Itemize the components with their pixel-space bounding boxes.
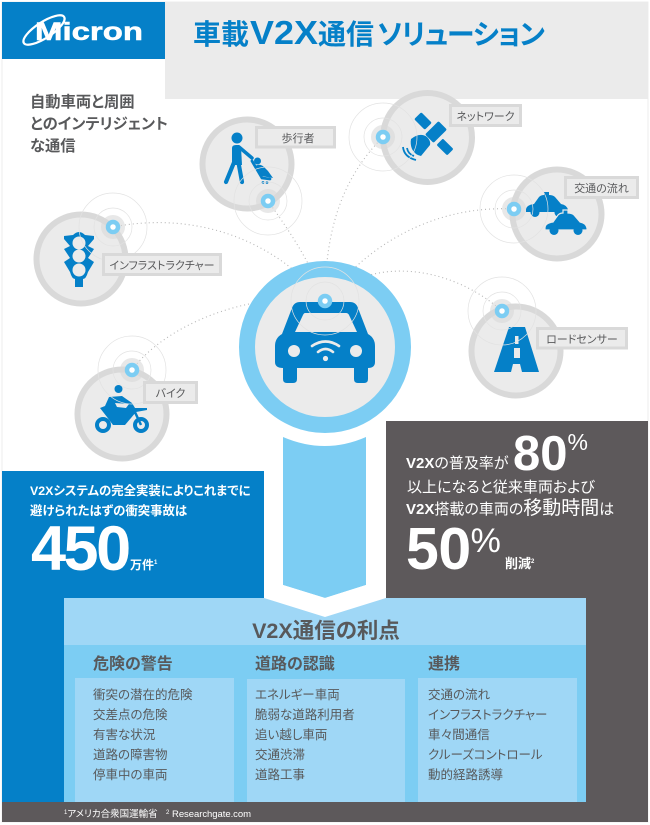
column: hazard warnings: 危険の警告	[93, 654, 173, 673]
intro text: とのインテリジェント	[30, 116, 168, 133]
title: V2X	[250, 14, 318, 51]
column: cooperation: インフラストラクチャー	[428, 708, 547, 722]
header band	[165, 2, 648, 99]
circle: motorbike	[78, 370, 166, 458]
column: road awareness: 交通渋滞	[255, 747, 305, 762]
tag: traffic flow: 交通の流れ	[574, 182, 629, 195]
title: ソリューション	[377, 19, 545, 50]
column: road awareness: 道路工事	[255, 767, 305, 782]
circle: pedestrian	[202, 120, 292, 208]
tag: pedestrian	[256, 128, 334, 147]
column: cooperation: 車々間通信	[428, 727, 490, 742]
tag: infrastructure: インフラストラクチャー	[109, 259, 215, 272]
intro text	[30, 93, 168, 155]
column: cooperation: クルーズコントロール	[428, 747, 543, 762]
number: 80%: %	[568, 429, 588, 455]
column: road awareness: エネルギー車両	[255, 688, 340, 702]
intro text: な通信	[30, 138, 76, 155]
icon: two cars	[526, 192, 587, 235]
number: 50%: %	[471, 522, 501, 560]
tag: motorbike	[144, 382, 196, 402]
number: 450: 450	[31, 514, 129, 584]
panel: collision statistic: 避けられたはずの衝突事故は	[30, 503, 187, 518]
column: hazard warnings: 停車中の車両	[93, 767, 168, 782]
tag: infrastructure	[104, 254, 220, 274]
column: road awareness: 脆弱な道路利用者	[255, 707, 355, 722]
logo: Micron: Micron	[35, 18, 143, 46]
title: 通信	[318, 19, 374, 50]
title: 車載	[193, 19, 249, 50]
circle: road sensor	[472, 306, 560, 396]
footer sources: Researchgate.com	[172, 809, 251, 820]
icon: road	[494, 327, 539, 372]
footer sources: 2	[166, 810, 170, 816]
signal nodes	[79, 103, 548, 404]
column: cooperation: 連携	[428, 654, 460, 673]
tag: pedestrian: 歩行者	[282, 131, 314, 145]
number: 50%: 50	[406, 516, 471, 582]
tag: road sensor	[538, 328, 626, 348]
panel: collision statistic	[2, 471, 264, 802]
central vehicle	[247, 269, 403, 425]
tag: motorbike: バイク	[155, 387, 185, 400]
column: cooperation	[418, 654, 577, 802]
panel: travel time statistic: V2Xの普及率が	[406, 455, 509, 472]
footer sources: アメリカ合衆国運輸省	[67, 808, 158, 820]
panel: travel time statistic: V2X搭載の車両の移動時間は	[406, 497, 614, 519]
panel: travel time statistic: 以上になると従来車両および	[407, 479, 595, 496]
circle: infrastructure	[36, 214, 126, 304]
icon: pedestrian with stroller	[226, 132, 273, 184]
column: road awareness: 道路の認識	[255, 654, 335, 673]
panel: V2X benefits	[64, 585, 586, 802]
downward arrow	[283, 437, 366, 598]
panel: travel time statistic: 削減	[505, 556, 531, 571]
circle: traffic flow	[512, 170, 602, 258]
column: road awareness: 追い越し車両	[255, 727, 327, 742]
circle: network	[383, 93, 472, 182]
panel: collision statistic: 1	[154, 560, 158, 566]
arrow tip	[264, 585, 386, 617]
column: road awareness	[247, 654, 405, 802]
icon: traffic light	[64, 232, 94, 287]
column: cooperation: 動的経路誘導	[428, 767, 504, 782]
column: hazard warnings: 有害な状況	[93, 727, 156, 742]
title	[193, 14, 545, 51]
column: cooperation: 交通の流れ	[428, 688, 491, 702]
panel: collision statistic: V2Xシステムの完全実装によりこれまでに	[30, 483, 251, 498]
tag: traffic flow	[566, 178, 638, 198]
benefits heading: V2X通信の利点	[252, 619, 400, 643]
logo: Micron	[2, 2, 165, 59]
panel: collision statistic: 万件	[130, 558, 154, 572]
footer sources	[2, 802, 648, 822]
tag: network	[450, 106, 520, 126]
icon: connected car	[275, 302, 375, 383]
number: 80%: 80	[513, 427, 568, 481]
intro text: 自動車両と周囲	[30, 93, 135, 111]
connection lines	[113, 137, 514, 370]
icon: satellite	[403, 112, 453, 160]
tag: network: ネットワーク	[456, 110, 515, 123]
column: hazard warnings: 交差点の危険	[93, 708, 168, 722]
column: hazard warnings: 道路の障害物	[93, 747, 168, 762]
icon: motorbike rider	[97, 385, 147, 431]
footer sources: 1	[64, 810, 68, 816]
panel: travel time statistic: 2	[531, 559, 535, 565]
panel: travel time statistic	[386, 421, 648, 802]
column: hazard warnings: 衝突の潜在的危険	[93, 687, 193, 702]
tag: road sensor: ロードセンサー	[546, 333, 618, 346]
column: hazard warnings	[75, 654, 234, 802]
